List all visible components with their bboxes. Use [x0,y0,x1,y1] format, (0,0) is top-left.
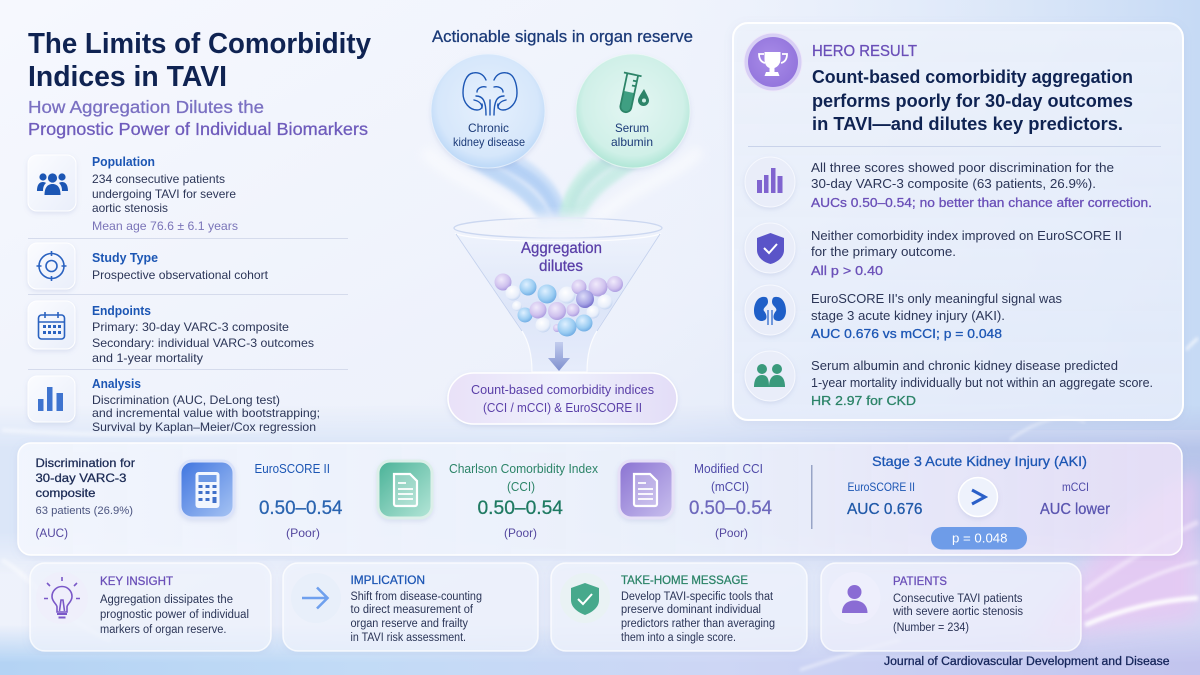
analysis text: Analysis [92,376,141,391]
bubble: chronic kidney disease [431,54,545,168]
title: The Limits of Comorbidity [28,28,371,60]
text: preserve dominant individual [621,604,761,616]
finding: albumin and CKD [745,351,1153,408]
text: 30-day VARC-3 composite (63 patients, 26.9%). [811,177,1096,191]
discrimination label: Discrimination for [36,456,135,470]
icon: document green [378,461,432,518]
hero label: HERO RESULT [812,43,918,60]
discrimination label: composite [36,486,96,500]
text: AUC 0.676 vs mCCI; p = 0.048 [811,327,1002,341]
analysis text: Survival by Kaplan–Meier/Cox regression [92,420,316,434]
endpoints text: Secondary: individual VARC-3 outcomes [92,336,314,350]
icon: two people [745,351,795,401]
text: All p > 0.40 [811,264,883,278]
pill: count-based indices: (CCI / mCCI) & EuroSCORE II [483,401,642,415]
journal credit: Journal of Cardiovascular Development and Disease [884,656,1170,668]
finding: no improvement [745,223,1122,278]
EuroSCORE II side: AUC 0.676 [847,501,922,518]
analysis text: and incremental value with bootstrapping; [92,406,320,420]
label: Chronic [468,121,509,135]
endpoints row [28,301,314,365]
icon: target [28,243,75,289]
finding: stage 3 AKI [745,285,1062,341]
metric: mCCI [619,461,772,540]
values: (Poor) [286,526,320,540]
analysis text: Discrimination (AUC, DeLong test) [92,393,280,407]
icon: light bulb [36,572,88,624]
text: Serum albumin and chronic kidney disease predicted [811,359,1118,373]
population text [92,154,238,233]
card: patients [821,563,1081,651]
panel: hero result [733,23,1183,420]
card: take-home message [551,563,807,651]
metric: CCI [378,461,599,540]
values: (CCI) [507,480,535,494]
icon: shield [560,573,610,623]
card: implication [283,563,538,651]
pill: count-based indices: Count-based comorbidity indices [471,383,654,397]
text: AUCs 0.50–0.54; no better than chance after correction. [811,196,1152,210]
panel: discrimination band [18,443,1182,555]
values: 0.50–0.54 [259,497,343,519]
finding: poor discrimination [745,157,1152,210]
analysis row [28,376,320,434]
text: stage 3 acute kidney injury (AKI). [811,309,1005,323]
population row [28,154,238,233]
hero headline: Count-based comorbidity aggregation [812,66,1133,87]
subtitle: How Aggregation Dilutes the [28,97,264,117]
values [254,462,343,540]
icon: document purple [619,461,673,518]
spheres [494,274,623,336]
values: (Poor) [715,526,748,540]
text [100,574,249,636]
icon: people [28,155,76,211]
hero headline: performs poorly for 30-day outcomes [812,90,1133,111]
bubble: serum albumin [576,54,690,168]
p value pill [931,527,1027,550]
text: KEY INSIGHT [100,574,174,588]
endpoints text: Endpoints [92,303,151,318]
text [811,359,1153,408]
text: for the primary outcome. [811,245,956,259]
title: Indices in TAVI [28,61,227,93]
text: to direct measurement of [350,604,474,616]
title [28,28,371,93]
text: Shift from disease-counting [350,591,482,603]
funnel label: Aggregation [521,240,602,257]
text: organ reserve and frailty [350,618,468,630]
icon: kidney [745,285,795,335]
mCCI side: mCCI [1062,482,1089,494]
arrow: funnel to indices [548,342,570,371]
mCCI side: AUC lower [1040,501,1110,518]
population text: Mean age 76.6 ± 6.1 years [92,219,238,233]
study type row [28,243,269,289]
study type text: Prospective observational cohort [92,268,269,282]
discrimination label: 63 patients (26.9%) [36,505,133,517]
values: Modified CCI [694,462,763,476]
heading: actionable signals: Actionable signals in organ reserve [432,28,693,46]
population text: undergoing TAVI for severe [92,187,236,201]
text: Develop TAVI-specific tools that [621,591,774,603]
funnel label: dilutes [539,258,583,275]
text: EuroSCORE II's only meaningful signal was [811,292,1062,306]
EuroSCORE II side [847,482,922,518]
discrimination label [36,456,135,540]
hero headline [812,66,1133,134]
flows into funnel [425,150,700,225]
icon: shield [745,223,795,273]
text: All three scores showed poor discrimination for the [811,161,1114,175]
text: predictors rather than averaging [621,618,775,630]
EuroSCORE II side: EuroSCORE II [848,482,915,494]
text: Aggregation dissipates the [100,594,233,606]
funnel [454,214,662,372]
text: markers of organ reserve. [100,624,226,636]
hero headline: in TAVI—and dilutes key predictors. [812,113,1123,134]
label: Serum [615,121,649,135]
icon: test tube and drop [616,73,649,114]
panel: study design [28,154,348,434]
icon: kidneys [463,73,517,115]
icon: bars [745,157,795,207]
analysis text [92,376,320,434]
text: with severe aortic stenosis [892,606,1023,618]
text: Neither comorbidity index improved on EuroSCORE II [811,229,1122,243]
values: 0.50–0.54 [689,497,772,519]
text: HR 2.97 for CKD [811,394,916,408]
text: PATIENTS [893,574,947,588]
values: 0.50–0.54 [478,497,563,519]
icon: person [828,572,880,624]
values: EuroSCORE II [254,462,330,476]
card: key insight [30,563,271,651]
label: albumin [611,135,653,149]
text [892,574,1023,634]
stage 3 AKI comparison [847,453,1110,550]
discrimination label: 30-day VARC-3 [36,471,127,485]
text [811,229,1122,278]
label [611,121,653,149]
values: (mCCI) [711,480,749,494]
endpoints text [92,303,314,365]
haze where flows enter the funnel [514,214,606,238]
population text: aortic stenosis [92,201,168,215]
text: 1-year mortality individually but not within an aggregate score. [811,376,1153,390]
text [811,292,1062,341]
population text: Population [92,154,155,169]
text [811,161,1152,210]
endpoints text: and 1-year mortality [92,351,203,365]
values: (Poor) [504,526,537,540]
population text: 234 consecutive patients [92,172,225,186]
icon: bar chart [28,376,75,422]
text: TAKE-HOME MESSAGE [621,573,748,587]
label [453,121,525,149]
discrimination label: (AUC) [36,528,68,540]
text: them into a single score. [621,632,736,644]
subtitle: Prognostic Power of Individual Biomarkers [28,119,368,139]
text: Consecutive TAVI patients [893,593,1023,605]
text [621,573,775,644]
funnel label [521,240,602,275]
icon: calculator [180,461,234,518]
icon: calendar [28,301,75,349]
icon: trophy [744,33,802,91]
mCCI side [1040,482,1110,518]
values [449,462,599,540]
endpoints text: Primary: 30-day VARC-3 composite [92,320,289,334]
subtitle [28,97,368,139]
study type text: Study Type [92,250,158,265]
p value pill: p = 0.048 [952,530,1008,546]
metric: EuroSCORE II [180,461,343,540]
pill: count-based indices [448,373,677,424]
comparison heading: Stage 3 Acute Kidney Injury (AKI) [872,453,1087,469]
text: in TAVI risk assessment. [350,632,466,644]
text [350,573,482,644]
icon: arrow [291,573,341,623]
text: IMPLICATION [350,573,425,587]
text: prognostic power of individual [100,609,249,621]
text: (Number = 234) [893,622,969,634]
label: kidney disease [453,135,525,149]
values: Charlson Comorbidity Index [449,462,599,476]
icon: greater than [958,478,998,516]
study type text [92,250,269,282]
values [689,462,772,540]
